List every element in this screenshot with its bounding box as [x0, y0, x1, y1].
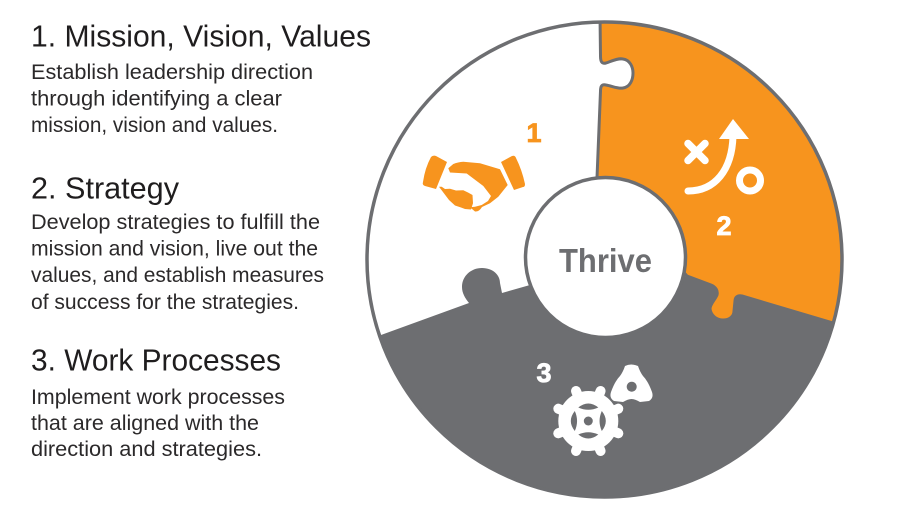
heading: work processes: 3. Work Processes [31, 344, 281, 378]
body text: work processes: Implement work processes [31, 386, 285, 409]
text block: work processes [31, 344, 285, 461]
body text: mission: Establish leadership direction [31, 61, 313, 84]
body text: strategy: mission and vision, live out the [31, 238, 318, 260]
body text: strategy: of success for the strategies. [31, 291, 299, 314]
number 2: 2 [716, 211, 732, 241]
text block: mission, vision, values [31, 20, 371, 137]
heading: mission, vision, values: 1. Mission, Vision, Values [31, 20, 371, 54]
outer ring [367, 22, 842, 497]
puzzle wheel diagram [366, 15, 860, 510]
icon: strategy play [688, 119, 760, 191]
center label: Thrive: Thrive [559, 242, 652, 279]
body text: mission: mission, vision and values. [31, 114, 278, 137]
small gear [610, 364, 653, 402]
puzzle piece 1: white [366, 22, 842, 498]
center circle [526, 178, 686, 338]
body text: work processes: direction and strategies. [31, 438, 262, 461]
icon: handshake [423, 156, 525, 212]
body text: strategy [31, 211, 324, 314]
heading: strategy: 2. Strategy [31, 172, 180, 206]
body text: work processes: that are aligned with the [31, 412, 259, 435]
body text: strategy: values, and establish measures [31, 264, 324, 287]
number 1: 1 [526, 118, 542, 148]
body text: mission [31, 61, 313, 137]
number 3: 3 [536, 358, 552, 388]
text block: strategy [31, 172, 324, 314]
icon: gears [558, 364, 653, 451]
puzzle piece 3: gray [381, 268, 832, 496]
body text: mission: through identifying a clear [31, 88, 282, 110]
body text: strategy: Develop strategies to fulfill the [31, 211, 320, 234]
body text: work processes [31, 386, 285, 461]
large gear [558, 391, 618, 451]
puzzle piece 2: orange [596, 24, 840, 322]
